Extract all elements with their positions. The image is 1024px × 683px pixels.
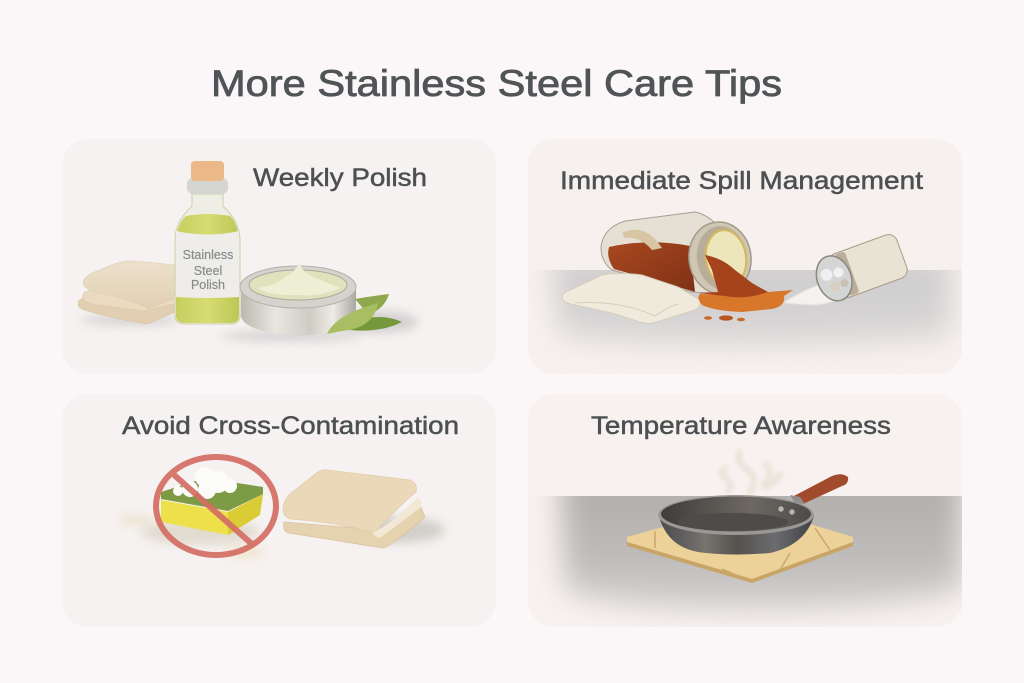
- icon: prohibition sign: [156, 457, 276, 555]
- panel: temperature awareness: [528, 394, 962, 627]
- icon: folded towel: [78, 261, 175, 324]
- counter surface: [560, 470, 962, 610]
- illustration shadow: [80, 311, 418, 341]
- icon: sponge with foam: [161, 467, 263, 535]
- icon: bamboo trivet: [627, 524, 853, 583]
- surface shadows and stains: [117, 517, 445, 556]
- heading: immediate spill management: Immediate Spill Management: [560, 167, 923, 195]
- icon: polish bottle: [175, 161, 240, 324]
- icon: steam: [722, 450, 780, 494]
- icon: frying pan: [658, 474, 848, 554]
- heading: temperature awareness: Temperature Awareness: [591, 412, 891, 440]
- panel: immediate spill management: [528, 139, 962, 374]
- bottle label text: [183, 248, 233, 292]
- bottle label text: Polish: [191, 278, 225, 292]
- icon: folded white towel: [562, 274, 700, 323]
- bottle label text: Stainless: [183, 248, 233, 262]
- icon: tipped jar with sauce: [601, 212, 756, 298]
- spilled salt: [783, 285, 840, 305]
- bottle label text: Steel: [194, 264, 222, 278]
- title: More Stainless Steel Care Tips: [211, 63, 782, 104]
- panel: avoid cross-contamination: [62, 394, 496, 627]
- spilled sauce: [698, 255, 793, 321]
- counter surface: [552, 255, 950, 345]
- icon: folded tan towel: [283, 470, 425, 548]
- heading: avoid cross-contamination: Avoid Cross-Contamination: [122, 412, 459, 440]
- icon: salt shaker: [810, 232, 910, 306]
- heading: weekly polish: Weekly Polish: [253, 164, 427, 192]
- icon: polish tin with cream: [240, 262, 356, 336]
- icon: leaves: [327, 294, 402, 334]
- panel: weekly polish: [62, 139, 496, 374]
